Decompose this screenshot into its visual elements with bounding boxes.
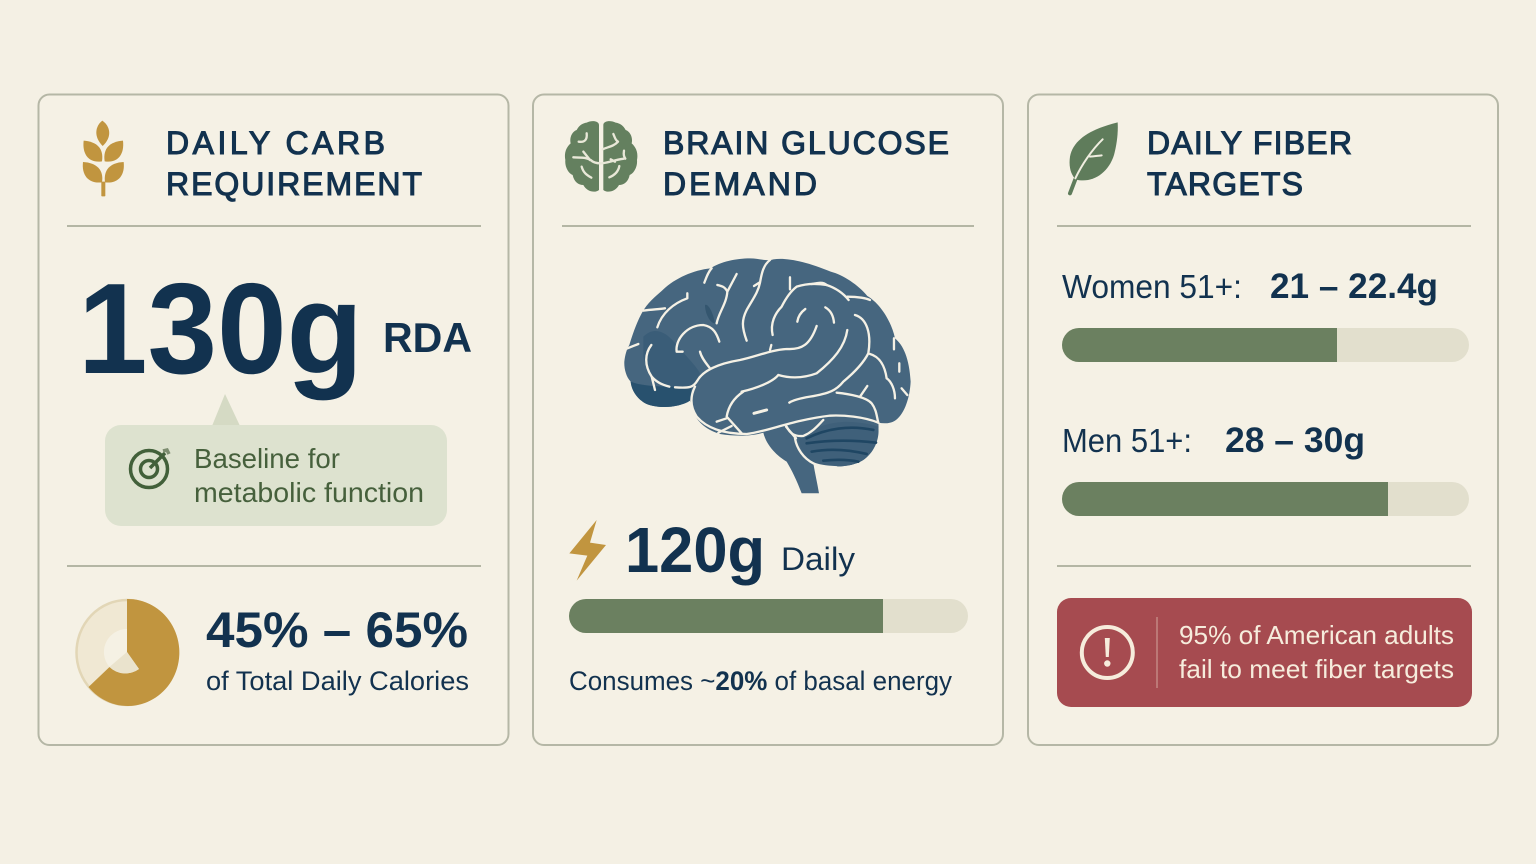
stat: 45% – 65% of total daily calories: of Total Daily Calories xyxy=(206,666,469,696)
callout: baseline for metabolic function: metabolic function xyxy=(194,477,424,508)
stat: 130g RDA: 130g xyxy=(78,257,363,401)
progress bar: women xyxy=(1062,328,1469,362)
heading: daily fiber targets: DAILY FIBER xyxy=(1147,125,1352,161)
icon: exclamation xyxy=(1082,627,1133,678)
pie chart: 45–65% of calories xyxy=(76,599,179,706)
icon: small green brain xyxy=(565,121,637,192)
heading: daily carb requirement: REQUIREMENT xyxy=(166,166,422,202)
heading: daily fiber targets: TARGETS xyxy=(1147,166,1303,202)
stat: 45% – 65% of total daily calories xyxy=(206,602,469,696)
stat: 120g daily: Daily xyxy=(781,541,855,577)
heading: daily carb requirement xyxy=(166,125,422,202)
callout: baseline for metabolic function: Baseline for xyxy=(194,443,340,474)
label: women 51+: Women 51+: xyxy=(1062,268,1242,305)
illustration: brain xyxy=(624,258,911,493)
stat: 120g daily xyxy=(625,514,855,586)
label: men 51+: 28 – 30g xyxy=(1225,421,1365,460)
heading: brain glucose demand: BRAIN GLUCOSE xyxy=(663,125,949,161)
alert: fiber shortfall xyxy=(1057,598,1472,707)
stat: 130g RDA: RDA xyxy=(383,314,472,361)
panel: brain glucose demand xyxy=(533,94,1003,745)
label: men 51+: Men 51+: xyxy=(1062,422,1192,459)
icon: leaf xyxy=(1070,122,1118,193)
progress bar: men xyxy=(1062,482,1469,516)
alert: fiber shortfall: 95% of American adults xyxy=(1179,620,1454,650)
caption: basal energy: Consumes ~20% of basal energy xyxy=(569,666,952,696)
progress bar: brain glucose xyxy=(569,599,968,633)
alert: fiber shortfall: fail to meet fiber targets xyxy=(1179,654,1454,684)
panel: daily fiber targets xyxy=(1028,94,1498,745)
icon: lightning bolt xyxy=(569,520,606,581)
icon: target xyxy=(130,450,169,488)
icon: wheat xyxy=(83,121,124,196)
label: women 51+ xyxy=(1062,267,1438,306)
callout: baseline for metabolic function xyxy=(105,394,447,526)
heading: daily carb requirement: DAILY CARB xyxy=(166,125,385,161)
heading: brain glucose demand xyxy=(663,125,949,202)
label: women 51+: 21 – 22.4g xyxy=(1270,267,1438,306)
heading: daily fiber targets xyxy=(1147,125,1352,202)
panel: daily carb requirement xyxy=(38,94,508,745)
label: men 51+ xyxy=(1062,421,1365,460)
stat: 120g daily: 120g xyxy=(625,514,765,586)
stat: 45% – 65% of total daily calories: 45% – 65% xyxy=(206,602,468,658)
heading: brain glucose demand: DEMAND xyxy=(663,166,817,202)
